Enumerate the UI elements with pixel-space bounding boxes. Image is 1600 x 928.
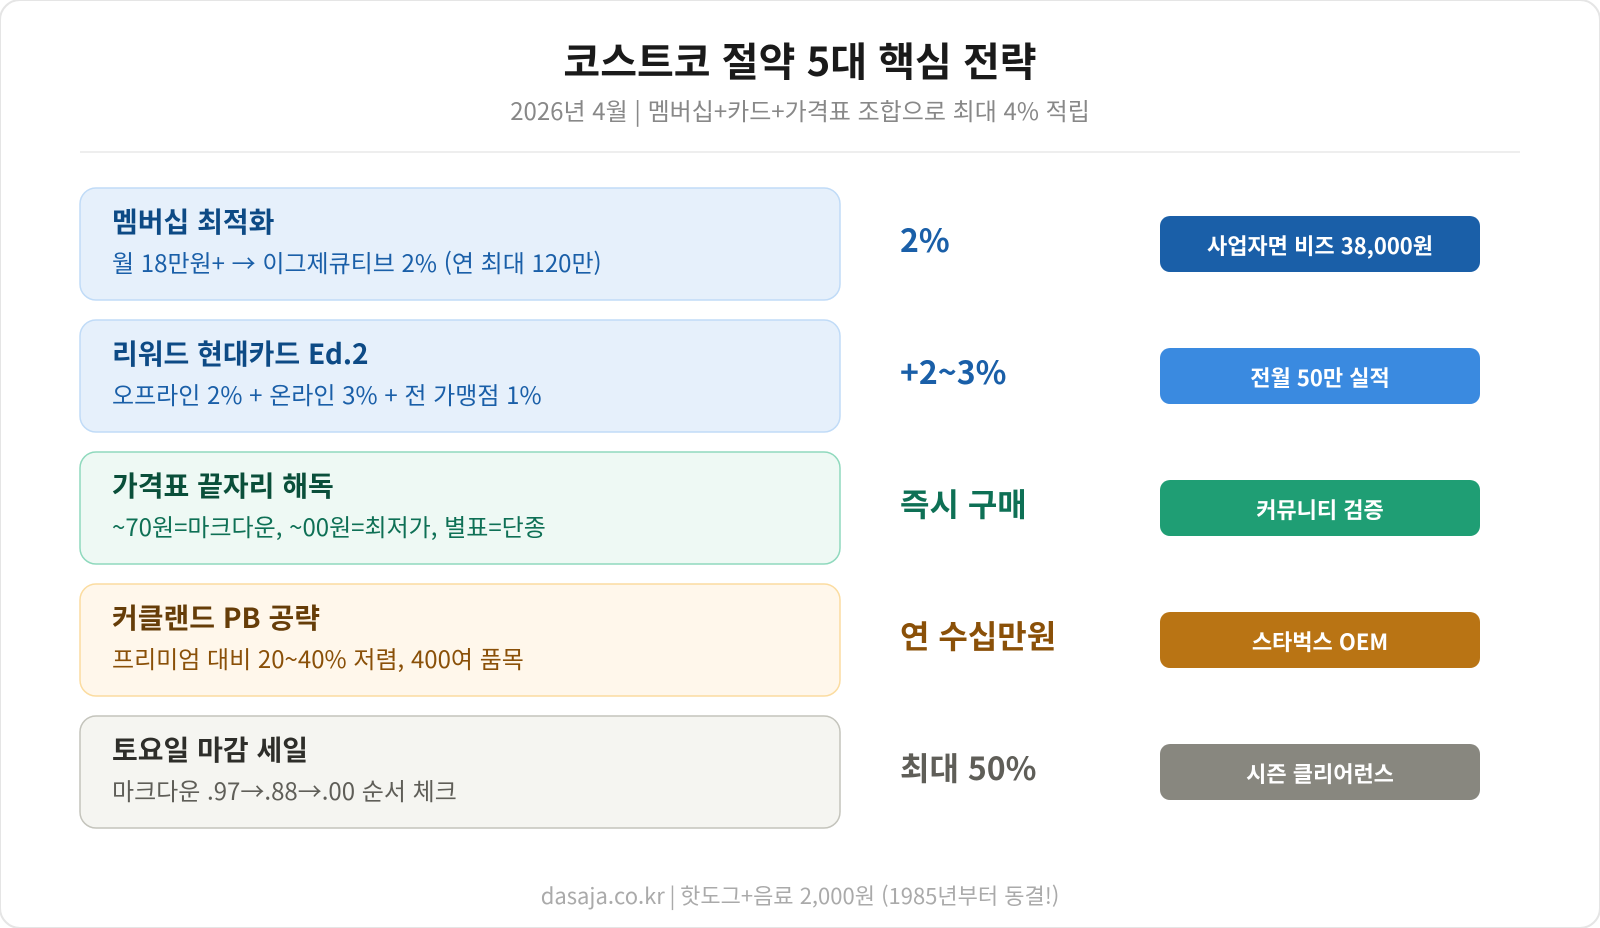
value: +2~3%: +2~3%: [900, 348, 1006, 394]
value: hundreds of thousands per year: 연 수십만원: [900, 612, 1056, 658]
badge: Starbucks OEM: 스타벅스 OEM: [1252, 625, 1388, 657]
heading: price tags: 가격표 끝자리 해독: [112, 465, 334, 505]
badge: community: 커뮤니티 검증: [1256, 493, 1384, 525]
value: 2%: 2%: [900, 216, 950, 262]
badge: season clearance: [1160, 744, 1480, 800]
row 5: Saturday sale: [80, 716, 1480, 828]
row 2: reward card: [80, 320, 1480, 432]
subtitle: 2026년 4월 | 멤버십+카드+가격표 조합으로 최대 4% 적립: [510, 92, 1090, 127]
badge: spending: 전월 50만 실적: [1250, 361, 1390, 393]
badge: business: [1160, 216, 1480, 272]
heading: Kirkland: 커클랜드 PB 공략: [112, 597, 320, 637]
row 4: Kirkland: [80, 584, 1480, 696]
panel: membership card: [80, 188, 840, 300]
panel: card: [80, 320, 840, 432]
value: up to 50%: 최대 50%: [900, 744, 1036, 790]
footer: dasaja.co.kr | 핫도그+음료 2,000원 (1985년부터 동결!): [541, 879, 1059, 911]
badge: community: [1160, 480, 1480, 536]
text: price tag detail: ~70원=마크다운, ~00원=최저가, 별표=단종: [112, 508, 546, 543]
badge: Starbucks OEM: [1160, 612, 1480, 668]
panel: Kirkland: [80, 584, 840, 696]
text: card detail: 오프라인 2% + 온라인 3% + 전 가맹점 1%: [112, 376, 542, 411]
row 3: price tags: [80, 452, 1480, 564]
row 1: membership: [80, 188, 1480, 300]
text: Saturday detail: 마크다운 .97→.88→.00 순서 체크: [112, 772, 457, 807]
heading: card: 리워드 현대카드 Ed.2: [112, 333, 369, 373]
badge: business: 사업자면 비즈 38,000원: [1207, 229, 1433, 261]
title: 코스트코 절약 5대 핵심 전략: [563, 30, 1037, 88]
heading: Saturday sale: 토요일 마감 세일: [112, 729, 308, 769]
text: Kirkland detail: 프리미엄 대비 20~40% 저렴, 400여 품목: [112, 640, 524, 675]
text: membership detail: 월 18만원+ → 이그제큐티브 2% (연 최대 120만): [112, 244, 602, 279]
value: immediate purchase: 즉시 구매: [900, 480, 1027, 526]
badge: season clearance: 시즌 클리어런스: [1246, 757, 1394, 789]
panel: price tags: [80, 452, 840, 564]
badge: spending: [1160, 348, 1480, 404]
heading: membership: 멤버십 최적화: [112, 201, 275, 241]
panel: Saturday sale: [80, 716, 840, 828]
